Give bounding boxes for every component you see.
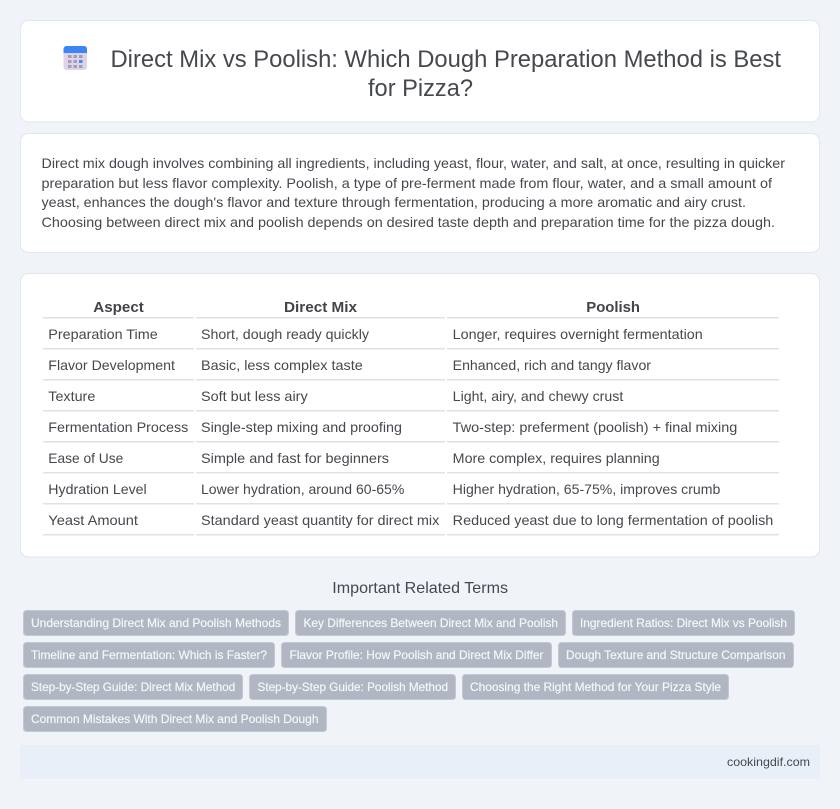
row: texture: Soft but less airy: [201, 388, 308, 404]
tag: [296, 610, 566, 636]
tag: [462, 674, 728, 700]
row: hydration level: Hydration Level: [48, 481, 147, 497]
tag: [24, 706, 326, 732]
tag: Common Mistakes With Direct Mix and Poolish Dough: [31, 712, 318, 726]
table header row: Aspect: [93, 299, 144, 316]
title: for Pizza?: [368, 75, 473, 102]
row: ease of use: [48, 450, 660, 466]
intro text: Direct mix dough involves combining all ingredients, including yeast, flour, water, and salt, at once, resulting in quicker: [42, 155, 785, 171]
row: fermentation process: Two-step: preferment (poolish) + final mixing: [453, 419, 737, 435]
tag: Timeline and Fermentation: Which is Faster?: [31, 648, 267, 662]
tag: [24, 610, 288, 636]
row: hydration level: [48, 481, 721, 497]
row: texture: Light, airy, and chewy crust: [453, 388, 623, 404]
panel: header: [20, 20, 820, 122]
row: fermentation process: [48, 419, 737, 435]
panel: comparison table: [20, 274, 820, 557]
row: preparation time: Short, dough ready quickly: [201, 326, 369, 342]
row: ease of use: Ease of Use: [48, 450, 124, 466]
tag: [558, 642, 794, 668]
row: flavor development: Basic, less complex taste: [201, 357, 363, 373]
tag: [572, 610, 794, 636]
table header row: Direct Mix: [284, 299, 358, 316]
row: yeast amount: Yeast Amount: [48, 512, 138, 528]
tag: [282, 642, 552, 668]
row: hydration level: Lower hydration, around 60-65%: [201, 481, 404, 497]
row: fermentation process: Fermentation Process: [48, 419, 188, 435]
footer: [20, 745, 820, 779]
panel: intro paragraph: [20, 134, 820, 252]
row: flavor development: [48, 357, 651, 373]
tag: [24, 674, 242, 700]
row: yeast amount: Standard yeast quantity for direct mix: [201, 512, 439, 528]
intro text: preparation but less flavor complexity. Poolish, a type of pre-ferment made from flour, water, and a small amount of: [42, 175, 772, 191]
tag: Step-by-Step Guide: Poolish Method: [258, 680, 448, 694]
row: yeast amount: [48, 512, 773, 528]
table rule lines: [43, 318, 779, 535]
intro text: Choosing between direct mix and poolish depends on desired taste depth and preparation time for the pizza dough.: [42, 214, 775, 230]
title: [110, 46, 781, 102]
intro text: yeast, enhances the dough's flavor and texture through fermentation, producing a more aromatic and airy crust.: [42, 194, 746, 210]
tag: Dough Texture and Structure Comparison: [566, 648, 786, 662]
tag: Choosing the Right Method for Your Pizza Style: [470, 680, 721, 694]
tag: Flavor Profile: How Poolish and Direct Mix Differ: [290, 648, 544, 662]
row: hydration level: Higher hydration, 65-75%, improves crumb: [453, 481, 721, 497]
row: fermentation process: Single-step mixing and proofing: [201, 419, 402, 435]
tag: [250, 674, 456, 700]
table header row: Poolish: [586, 299, 640, 316]
row: preparation time: Preparation Time: [48, 326, 158, 342]
row: texture: [48, 388, 623, 404]
row: flavor development: Enhanced, rich and tangy flavor: [453, 357, 651, 373]
footer: cookingdif.com: [727, 755, 810, 769]
title: Direct Mix vs Poolish: Which Dough Preparation Method is Best: [110, 46, 781, 73]
row: flavor development: Flavor Development: [48, 357, 175, 373]
tag: Key Differences Between Direct Mix and Poolish: [304, 616, 558, 630]
heading: important related terms: Important Related Terms: [332, 580, 508, 597]
tag: Step-by-Step Guide: Direct Mix Method: [31, 680, 235, 694]
icon: calendar: [64, 46, 87, 70]
row: texture: Texture: [48, 388, 96, 404]
intro text: [42, 155, 785, 230]
row: ease of use: More complex, requires planning: [453, 450, 660, 466]
row: preparation time: Longer, requires overnight fermentation: [453, 326, 703, 342]
row: yeast amount: Reduced yeast due to long fermentation of poolish: [453, 512, 773, 528]
tag: Understanding Direct Mix and Poolish Methods: [31, 616, 281, 630]
tag: [24, 642, 274, 668]
row: ease of use: Simple and fast for beginners: [201, 450, 389, 466]
tag: Ingredient Ratios: Direct Mix vs Poolish: [580, 616, 787, 630]
table header row: [93, 299, 640, 316]
row: preparation time: [48, 326, 703, 342]
related term tags: [24, 610, 794, 732]
